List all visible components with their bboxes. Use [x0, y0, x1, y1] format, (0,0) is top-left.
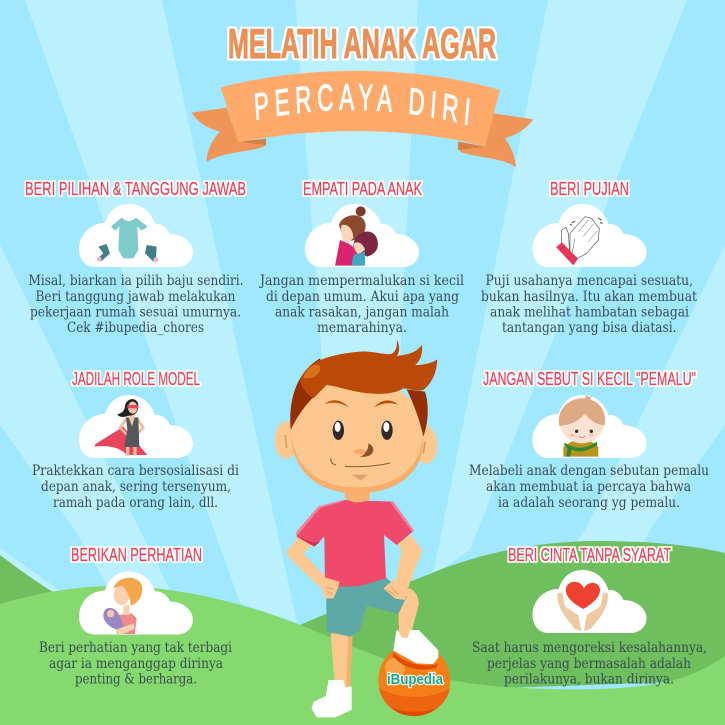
panel: berikan perhatian: penting & berharga.	[75, 672, 197, 688]
panel: beri pujian: anak melihat hambatan sebagai	[490, 304, 689, 320]
panel: role model: ramah pada orang lain, dll.	[53, 495, 218, 511]
panel: beri pilihan: Misal, biarkan ia pilih baju sendiri.	[28, 273, 244, 289]
icon: shy boy	[559, 395, 605, 457]
ball	[378, 644, 450, 716]
panel: empati: anak rasakan, jangan malah	[275, 304, 449, 320]
panel: role model: JADILAH ROLE MODEL	[72, 369, 200, 389]
panel: empati: di depan umum. Akui apa yang	[266, 289, 459, 305]
panel: beri pujian: BERI PUJIAN	[550, 179, 629, 199]
panel: role model	[32, 369, 239, 511]
panel: role model: Praktekkan cara bersosialisasi di	[32, 463, 239, 479]
panel: jangan sebut pemalu: ia adalah seorang yg pemalu.	[498, 495, 680, 511]
icon: clapping hands	[556, 217, 603, 265]
icon: baby clothes	[97, 218, 158, 262]
boy character	[275, 339, 450, 716]
panel: berikan perhatian: agar ia menganggap dirinya	[49, 656, 223, 672]
panel: empati: memarahinya.	[317, 320, 407, 336]
icon: mother and baby	[103, 578, 142, 634]
panel: jangan sebut pemalu	[469, 369, 709, 511]
panel: beri pujian: tantangan yang bisa diatasi.	[502, 320, 676, 336]
panel: cinta tanpa syarat	[472, 545, 707, 688]
panel: jangan sebut pemalu: akan membuat ia percaya bahwa	[486, 479, 691, 495]
panel: beri pilihan: Cek #ibupedia_chores	[67, 320, 204, 336]
title: MELATIH ANAK AGAR	[228, 20, 496, 67]
panel: empati	[258, 179, 464, 336]
panel: beri pilihan: Beri tanggung jawab melakukan	[36, 289, 236, 305]
panel: beri pujian: bukan hasilnya. Itu akan membuat	[481, 289, 697, 305]
panel: beri pilihan: BERI PILIHAN & TANGGUNG JAWAB	[25, 179, 246, 199]
panel: berikan perhatian: BERIKAN PERHATIAN	[71, 545, 202, 565]
banner text: PERCAYA DIRI	[254, 84, 470, 126]
panel: beri pilihan: pekerjaan rumah sesuai umurnya.	[30, 304, 241, 320]
panel: beri pujian: Puji usahanya mencapai sesuatu,	[486, 273, 693, 289]
panel: berikan perhatian: Beri perhatian yang tak terbagi	[39, 640, 232, 656]
panel: cinta tanpa syarat: perilakunya, bukan dirinya.	[504, 672, 674, 688]
panel: empati: EMPATI PADA ANAK	[303, 179, 422, 199]
panel: berikan perhatian	[39, 545, 232, 688]
hills	[0, 541, 725, 725]
panel: cinta tanpa syarat: perjelas yang bermasalah adalah	[487, 656, 691, 672]
logo: iBupedia	[387, 671, 444, 688]
panel: beri pilihan	[25, 179, 246, 336]
ribbon banner	[192, 70, 534, 168]
panel: beri pujian	[481, 179, 697, 336]
icon: superhero mother	[95, 399, 147, 456]
body and limbs	[287, 500, 437, 716]
icon: mother hugging child	[335, 206, 378, 266]
panel: empati: Jangan mempermalukan si kecil	[258, 273, 464, 289]
head	[275, 339, 437, 502]
icon: heart in hands	[557, 582, 608, 631]
panel: role model: depan anak, sering tersenyum,	[41, 479, 231, 495]
